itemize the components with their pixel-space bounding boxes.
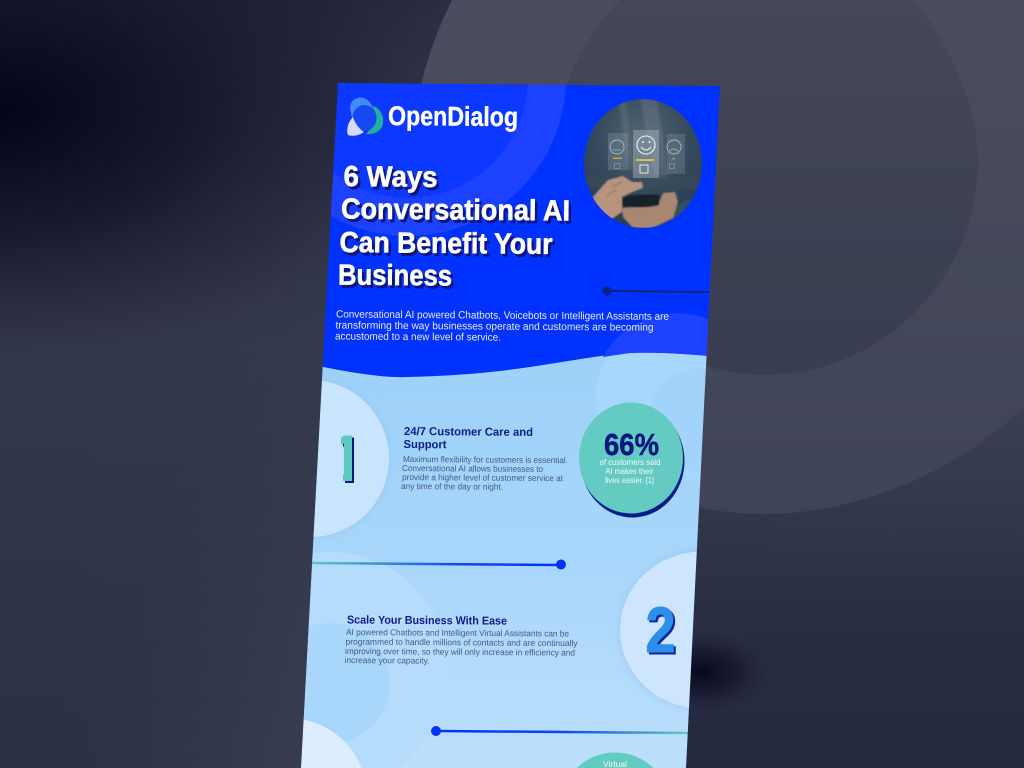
photo: hand holding phone with rating faces xyxy=(584,98,704,232)
section 1 text: provide a higher level of customer service at xyxy=(402,472,564,483)
section 1 heading xyxy=(403,426,533,451)
rating panels xyxy=(608,130,685,178)
section 1 number badge xyxy=(314,380,389,537)
panel: header xyxy=(322,83,720,378)
infographic card xyxy=(301,83,720,768)
connector line 2 xyxy=(431,726,690,736)
logo wordmark: OpenDialog xyxy=(388,101,518,132)
panel: body background xyxy=(312,356,700,768)
title: 6 Ways xyxy=(346,164,440,197)
stat circle: 66%: of customers said xyxy=(600,458,660,467)
section 1 heading: Support xyxy=(403,439,447,451)
section 2 number badge: 2 xyxy=(648,596,678,668)
infographic card: Conversational AI xyxy=(341,194,570,227)
decorative background ring xyxy=(418,0,1024,514)
section 2 number badge xyxy=(619,552,697,710)
section 2 text: increase your capacity. xyxy=(344,655,430,666)
logo xyxy=(347,97,518,136)
decorative body circles xyxy=(304,353,706,741)
section 1 text: Conversational AI allows businesses to xyxy=(402,463,543,474)
decorative header line xyxy=(602,286,709,296)
stat circle: 66% xyxy=(579,402,684,518)
connector line 1 xyxy=(305,560,566,570)
stat circle: virtual xyxy=(577,753,653,768)
section 1 heading: 24/7 Customer Care and xyxy=(404,426,533,439)
title xyxy=(340,164,573,295)
intro text xyxy=(335,310,668,341)
icon: chat blob logo xyxy=(347,97,383,136)
title: Conversational AI xyxy=(343,197,573,231)
section 2 text xyxy=(344,627,578,666)
section 1 number badge: 1 xyxy=(328,421,365,495)
stat circle: 66%: AI makes their xyxy=(606,467,654,476)
section 1 text: any time of the day or night. xyxy=(401,481,503,492)
stat circle: 66%: lives easier. [1] xyxy=(605,476,654,485)
section 1 text xyxy=(401,454,568,492)
intro text: Conversational AI powered Chatbots, Voicebots or Intelligent Assistants are xyxy=(336,309,669,323)
section 3 number badge xyxy=(301,720,362,768)
section 2 text: improving over time, so they will only increase in efficiency and xyxy=(345,646,575,658)
hand and phone xyxy=(592,175,693,228)
title: Can Benefit Your xyxy=(342,230,555,264)
stat circle: 66%: 66% xyxy=(604,427,659,462)
infographic card: 6 Ways xyxy=(343,161,438,194)
title: Business xyxy=(340,263,455,295)
section 1 text: Maximum flexibility for customers is essential. xyxy=(403,454,568,465)
intro text: transforming the way businesses operate and customers are becoming xyxy=(335,320,654,334)
section 2 number badge: 2 xyxy=(646,594,676,666)
section 2 text: programmed to handle millions of contacts and are continually xyxy=(345,637,578,648)
intro text: accustomed to a new level of service. xyxy=(335,331,501,344)
decorative header circles xyxy=(331,83,708,357)
section 2 heading: Scale Your Business With Ease xyxy=(347,615,507,628)
section 2 text: AI powered Chatbots and Intelligent Virtual Assistants can be xyxy=(346,627,569,639)
infographic card: Can Benefit Your xyxy=(339,227,553,261)
section 1 number badge: 1 xyxy=(330,423,367,497)
infographic card: Business xyxy=(338,260,452,292)
